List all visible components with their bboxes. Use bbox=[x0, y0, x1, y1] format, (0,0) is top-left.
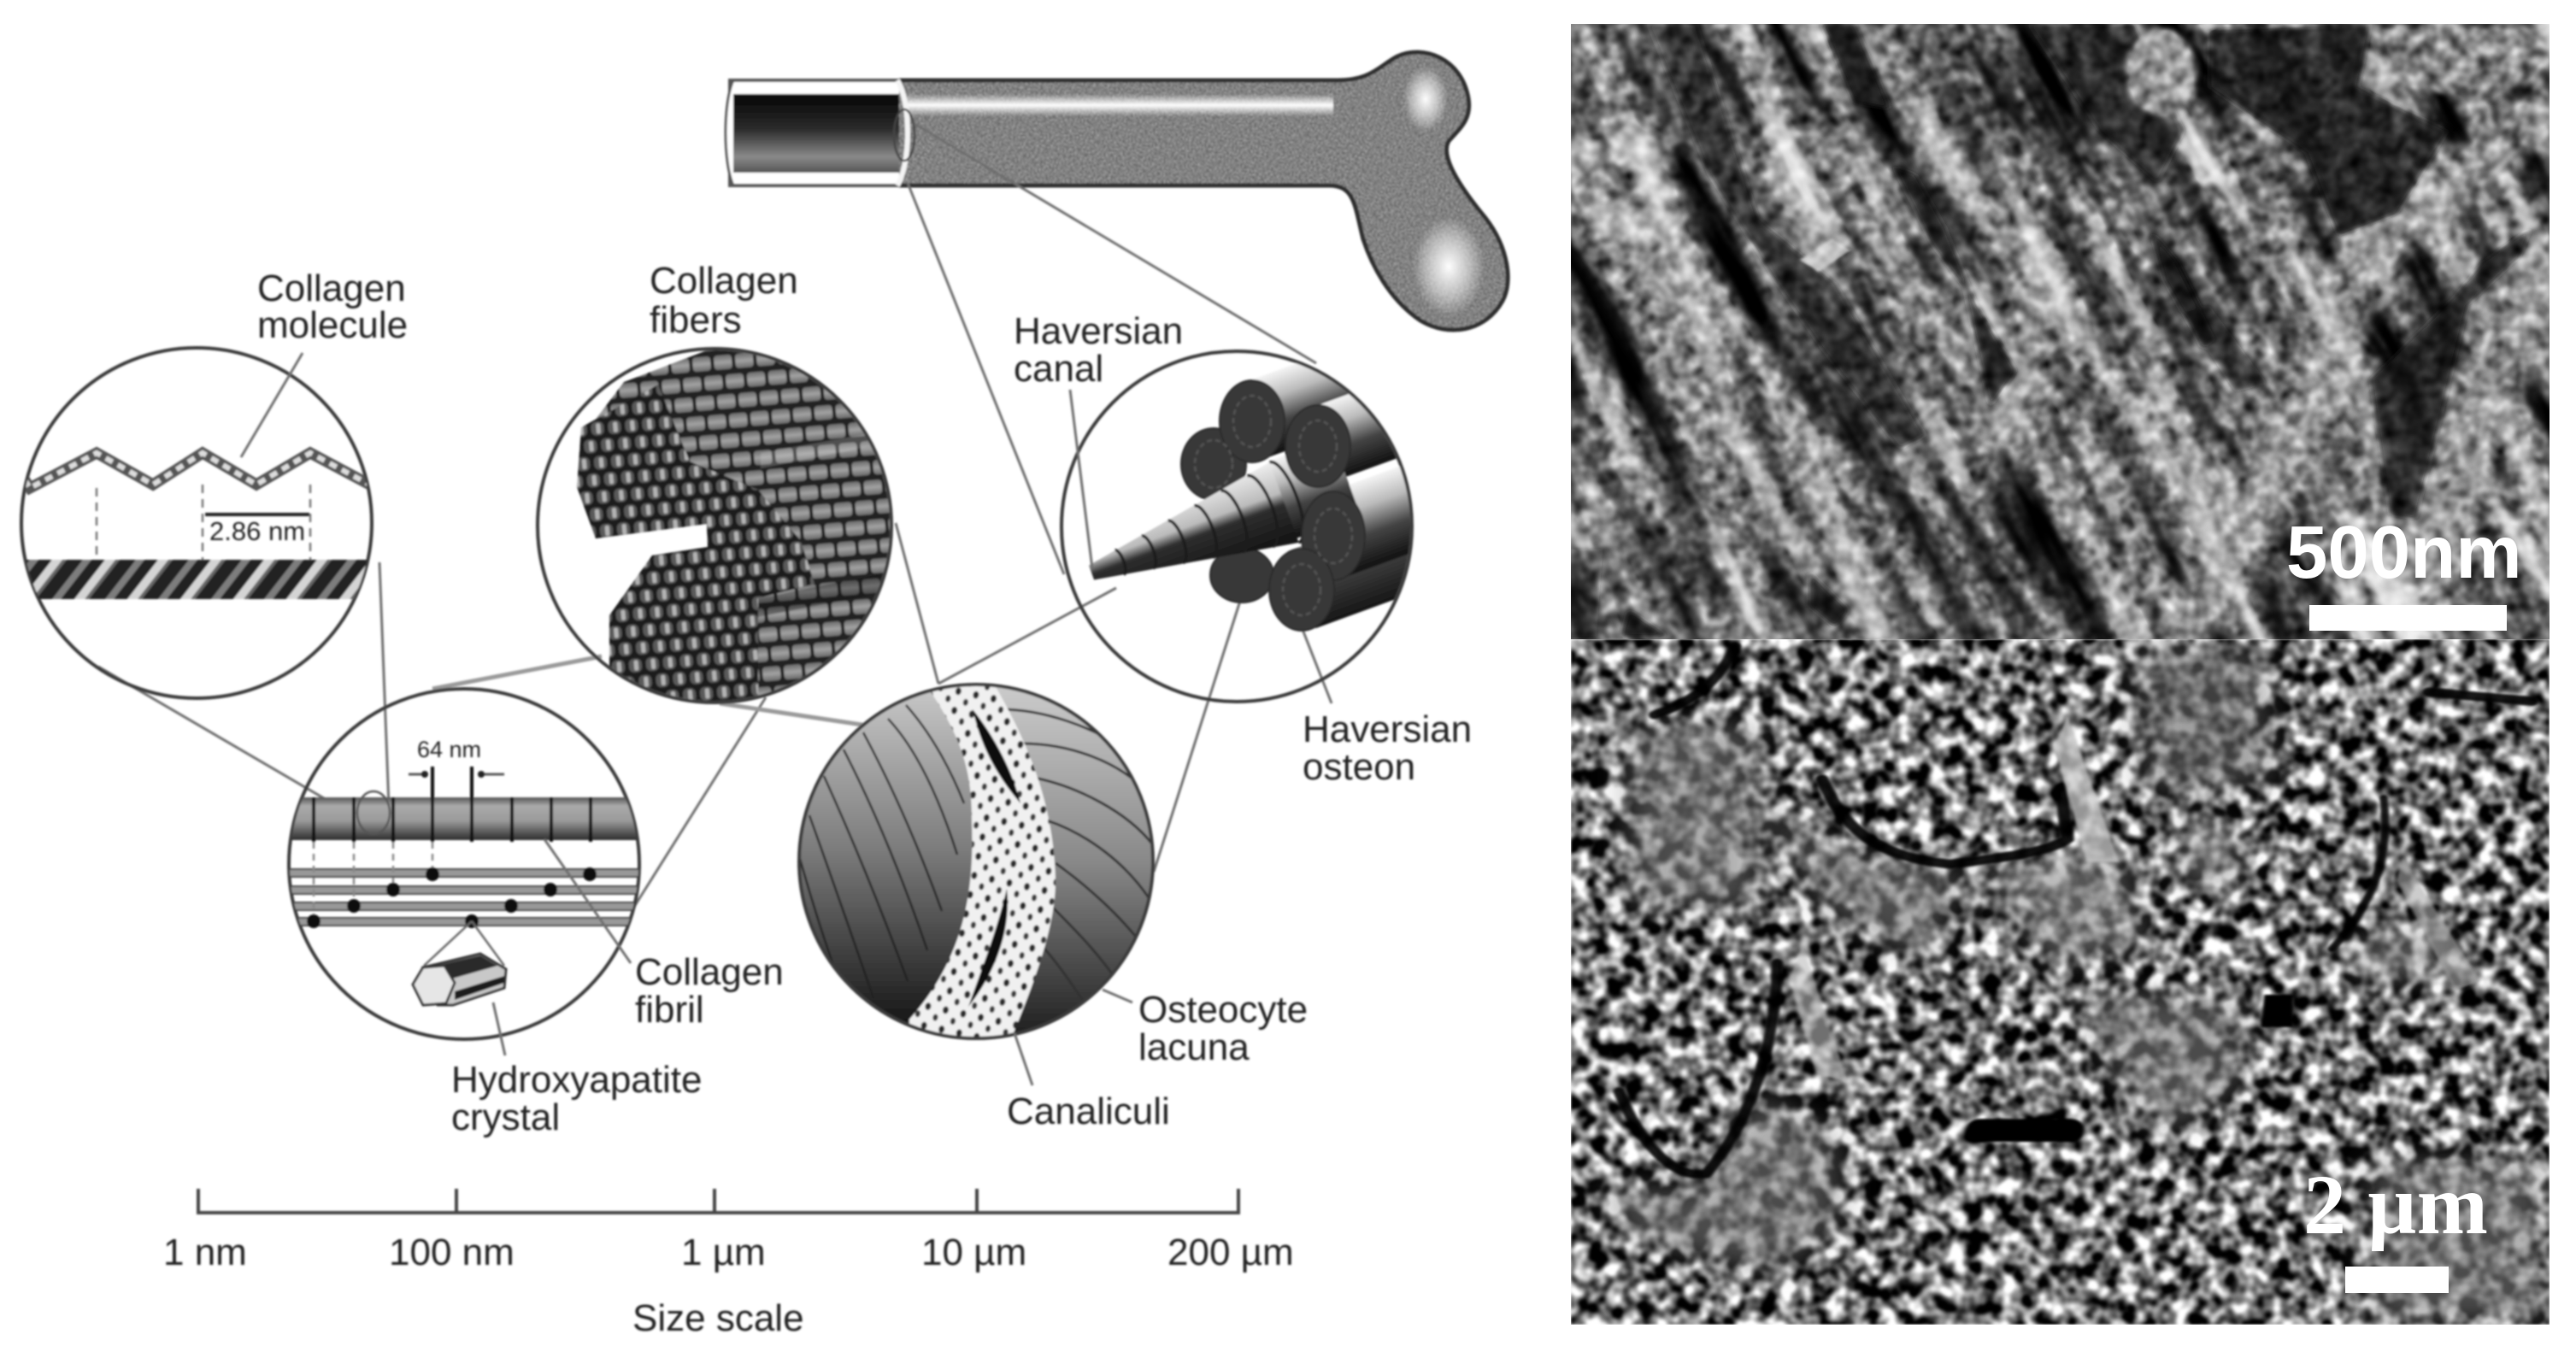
icon: tapered haversian canal bbox=[1088, 459, 1304, 581]
panel: osteon lamellae sphere bbox=[795, 675, 1171, 1085]
label: collagen fibers: Collagen bbox=[650, 260, 798, 302]
label: collagen fibers bbox=[650, 260, 798, 341]
label: haversian osteon bbox=[1303, 708, 1472, 788]
label: osteocyte lacuna: Osteocyte bbox=[1138, 989, 1308, 1031]
leader: haversian canal bbox=[1070, 390, 1092, 568]
diagram: hierarchical bone structure bbox=[17, 43, 1605, 1339]
leader lines between levels bbox=[98, 124, 1332, 907]
label: collagen fibril: Collagen bbox=[635, 951, 784, 993]
scale bar: 2 µm: 2 µm bbox=[2303, 1157, 2488, 1252]
micrograph: aligned mineralised fibres (500 nm) bbox=[1135, 0, 2576, 1258]
icon: twisted rope of collagen bbox=[22, 560, 373, 599]
size scale labels: 100 nm bbox=[389, 1231, 515, 1273]
label: hydroxyapatite crystal: Hydroxyapatite bbox=[451, 1059, 702, 1101]
size scale labels bbox=[163, 1231, 1294, 1273]
icon: hydroxyapatite crystal bbox=[413, 921, 506, 1005]
label: collagen fibril bbox=[635, 951, 784, 1031]
measurement: 64 nm bbox=[409, 737, 504, 778]
lacuna slits bbox=[968, 709, 1020, 1007]
panel: collagen molecule circle bbox=[17, 348, 376, 698]
label: collagen molecule: molecule bbox=[257, 304, 408, 346]
illustration: femur bone bbox=[726, 43, 1521, 342]
size scale labels: 1 nm bbox=[163, 1231, 247, 1273]
label: haversian osteon: Haversian bbox=[1303, 708, 1472, 750]
label: canaliculi: Canaliculi bbox=[1007, 1090, 1170, 1132]
label: osteocyte lacuna: lacuna bbox=[1138, 1026, 1250, 1068]
chart element: collagen triple-helix wave bbox=[17, 453, 376, 488]
size scale labels: 1 µm bbox=[681, 1231, 766, 1273]
size scale labels: 200 µm bbox=[1167, 1231, 1294, 1273]
label: hydroxyapatite crystal: crystal bbox=[451, 1096, 560, 1138]
dotted bone matrix with canaliculi bbox=[906, 679, 1056, 1051]
label: collagen molecule bbox=[257, 267, 408, 346]
left lamella bbox=[795, 684, 1017, 1043]
panel: haversian system circle bbox=[1058, 348, 1415, 705]
label: hydroxyapatite crystal bbox=[451, 1059, 702, 1138]
panel: collagen fibers circle bbox=[538, 346, 906, 709]
scale bar: 500 nm bbox=[2286, 511, 2522, 631]
scale bar: 500 nm: 500nm bbox=[2286, 511, 2522, 594]
label: haversian canal bbox=[1014, 310, 1183, 390]
measurement: 64 nm: 64 nm bbox=[417, 737, 481, 762]
label: haversian canal: canal bbox=[1014, 348, 1103, 390]
size scale axis bbox=[198, 1189, 1238, 1213]
label: osteocyte lacuna bbox=[1138, 989, 1308, 1068]
size scale labels: 10 µm bbox=[921, 1231, 1026, 1273]
panel: collagen fibril circle bbox=[286, 689, 645, 1055]
label: haversian canal: Haversian bbox=[1014, 310, 1183, 352]
bars: tropocollagen rows with dots bbox=[286, 842, 645, 928]
scale bar: 2 µm bbox=[2303, 1157, 2488, 1293]
band: collagen fibril bbox=[286, 797, 645, 840]
label: collagen fibers: fibers bbox=[650, 299, 742, 341]
micrograph: etched lamellar surface (2 µm) bbox=[1571, 639, 2550, 1325]
label: collagen molecule: Collagen bbox=[257, 267, 406, 309]
label: haversian osteon: osteon bbox=[1303, 746, 1415, 788]
measurement: 2.86 nm: 2.86 nm bbox=[209, 516, 305, 546]
label: collagen fibril: fibril bbox=[635, 989, 704, 1031]
right lamella bbox=[983, 675, 1171, 1051]
label: size scale: Size scale bbox=[632, 1297, 804, 1339]
